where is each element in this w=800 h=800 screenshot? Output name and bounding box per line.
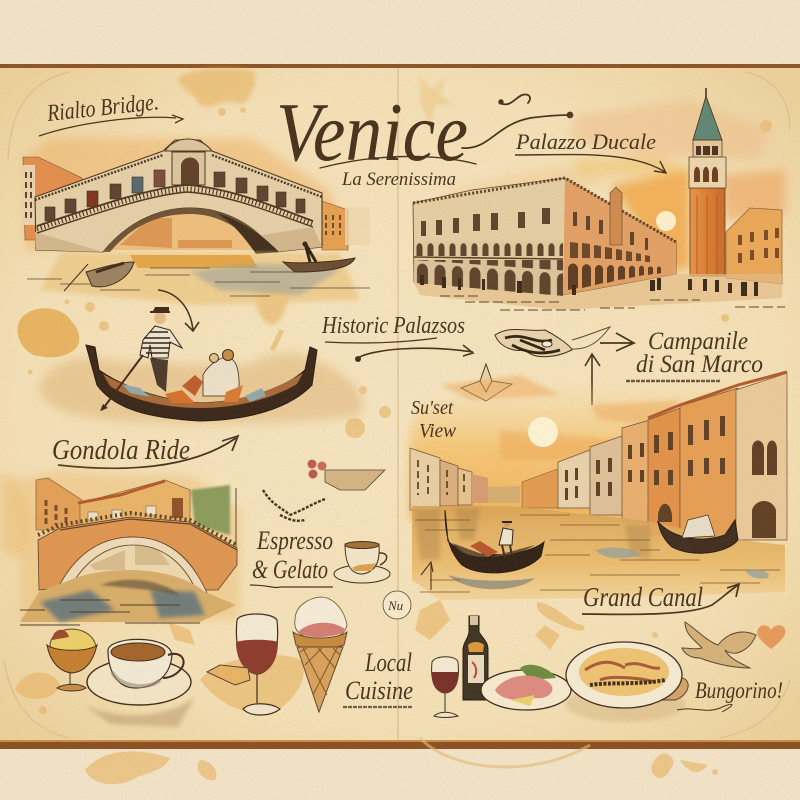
sunset sky wash <box>450 100 785 270</box>
icon: heart <box>757 625 785 649</box>
square buildings <box>726 208 782 284</box>
balustrade <box>37 185 313 226</box>
icon: small wine glass <box>432 657 458 718</box>
Local Cuisine label <box>343 648 413 707</box>
sun <box>656 211 676 231</box>
Rialto Bridge label: Rialto Bridge. <box>45 89 160 127</box>
subtitle: La Serenissima <box>341 169 456 190</box>
Local Cuisine label: Local <box>364 648 412 677</box>
campanile <box>689 88 726 276</box>
ornament: flower and paper <box>308 460 385 490</box>
circular logo <box>383 591 411 619</box>
Suiset View label <box>411 397 457 442</box>
Palazzo Ducale label: Palazzo Ducale <box>515 129 656 154</box>
title flourishes <box>320 95 572 168</box>
Campanile label <box>626 328 763 381</box>
small boats <box>64 242 355 291</box>
icon: napkin <box>207 665 250 685</box>
background behind arch <box>110 210 272 250</box>
buildings <box>36 478 236 560</box>
Espresso and Gelato label: Espresso <box>256 526 333 555</box>
icon: wine bottle <box>463 616 488 700</box>
roof temple <box>165 139 212 185</box>
illustration: Grand Canal <box>410 372 787 600</box>
gondola left <box>421 510 544 590</box>
Gondola Ride label: Gondola Ride <box>52 434 190 466</box>
right buildings <box>522 372 787 540</box>
water <box>40 253 360 305</box>
arrow to gondola <box>158 290 199 331</box>
Campanile label: Campanile <box>648 328 748 355</box>
icon: pasta plate <box>565 642 688 722</box>
water <box>20 570 236 622</box>
palace windows <box>421 208 648 250</box>
cornice <box>35 155 322 200</box>
Campanile label: di San Marco <box>636 351 763 378</box>
Bungorino label <box>677 678 783 712</box>
Suiset View label: View <box>419 420 457 442</box>
plaza and crowd <box>414 274 785 310</box>
canal sun <box>528 417 558 447</box>
heading: Venice title <box>276 86 572 190</box>
icon: folded hat <box>682 622 756 668</box>
bridge <box>38 517 237 590</box>
illustration: gondola <box>39 307 363 424</box>
hull <box>86 345 317 421</box>
arch shadow <box>103 208 277 253</box>
illustration: small canal bridge <box>10 470 240 625</box>
up arrow <box>585 354 600 405</box>
icon: coffee cup and saucer <box>85 639 195 727</box>
Suiset View label: Su'set <box>411 397 453 419</box>
illustration: Rialto Bridge <box>23 138 370 305</box>
gondolier <box>100 307 182 411</box>
Venetian mask icon <box>495 327 610 357</box>
Espresso and Gelato label: & Gelato <box>252 555 328 584</box>
icon: gelato bowl <box>47 629 97 691</box>
Espresso and Gelato label <box>250 526 333 588</box>
arcades <box>414 241 563 256</box>
Historic Palazsos label <box>321 313 473 362</box>
icon: salad plate <box>481 665 571 710</box>
Local Cuisine label: Cuisine <box>345 676 413 705</box>
Palazzo Ducale label <box>515 129 666 173</box>
circular logo: Nu <box>387 598 404 613</box>
passengers <box>182 350 243 402</box>
gondola right <box>658 515 738 553</box>
side buildings <box>23 157 370 250</box>
icon: wine glass <box>236 614 280 715</box>
canal sunset <box>410 375 780 520</box>
icon: small espresso cup <box>334 542 390 583</box>
canal view through arch <box>60 540 207 594</box>
interior <box>103 373 303 408</box>
palace <box>413 178 676 296</box>
bridge windows <box>45 170 305 221</box>
icon: ice cream cone <box>293 597 347 712</box>
ornament: wreath <box>263 490 325 521</box>
Bungorino label: Bungorino! <box>695 678 783 703</box>
illustration: Palazzo Ducale and Campanile <box>413 88 785 310</box>
bridge body <box>35 140 322 252</box>
left buildings <box>410 448 520 510</box>
heading: Venice title: Venice <box>276 86 468 179</box>
canal water <box>412 506 785 600</box>
small arrow <box>421 562 433 590</box>
Grand Canal label: Grand Canal <box>583 582 703 612</box>
paper boat icon <box>461 364 512 401</box>
Historic Palazsos label: Historic Palazsos <box>321 313 465 339</box>
arrow to Campanile <box>600 333 634 351</box>
